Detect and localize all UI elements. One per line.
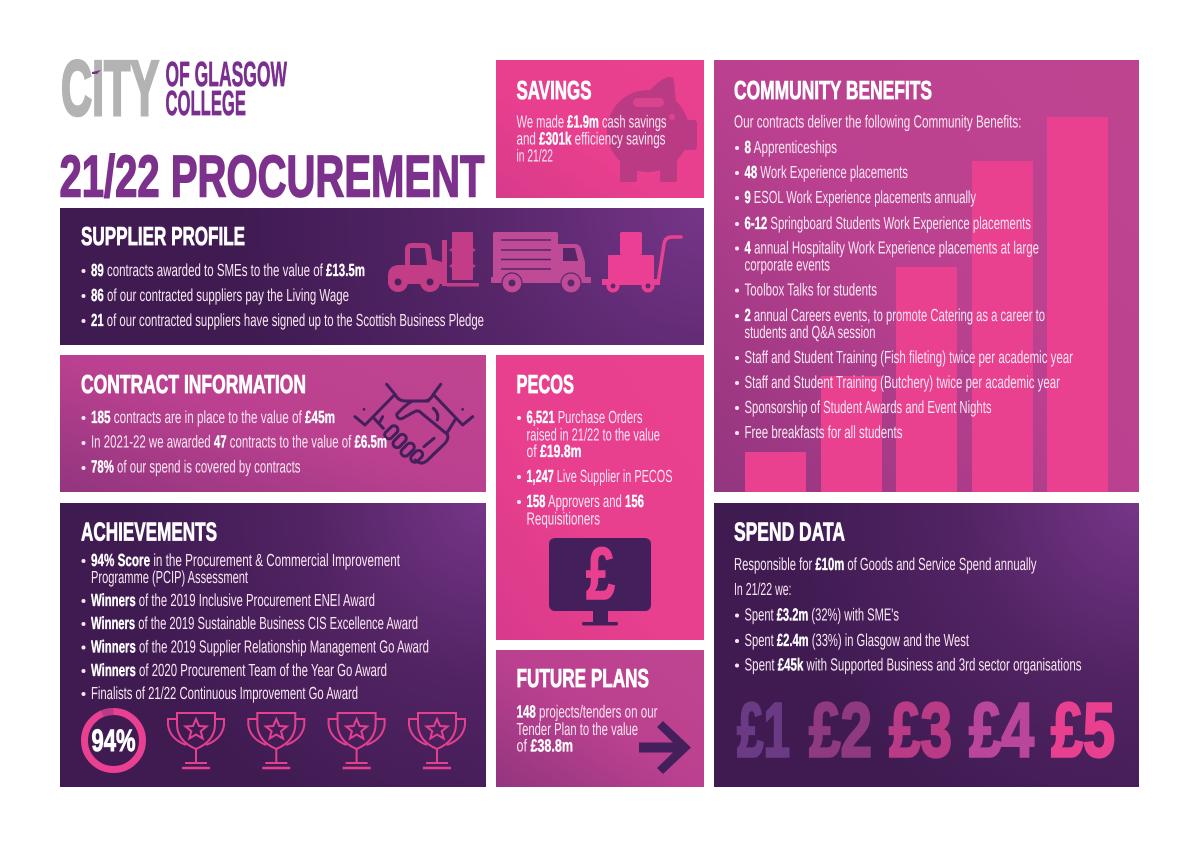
icon: arrow [639,721,691,774]
graphic: pound figures: £4 [969,688,1034,774]
icon: handshake [355,384,473,464]
graphic: pound figures: £1 [737,688,790,774]
graphic: pound figures: £2 [809,688,872,774]
list: community benefits: 2 annual Careers events, to promote Catering as a career to [744,305,1045,325]
logo: City of Glasgow College: CITY [61,44,159,132]
text: future plans detail: Tender Plan to the value [516,719,638,739]
heading: achievements: ACHIEVEMENTS [81,516,217,546]
heading: community benefits: COMMUNITY BENEFITS [734,75,932,105]
list: achievements: 94% Score in the Procurement & Commercial Improvement [91,550,400,570]
title: 21/22 PROCUREMENT [60,144,485,210]
icon: trophy 4 [409,713,465,768]
icon: delivery truck [491,232,591,293]
graphic: pound figures: £3 [889,688,952,774]
list: achievements: Winners of the 2019 Sustainable Business CIS Excellence Award [91,613,418,633]
list: community benefits: 9 ESOL Work Experience placements annually [744,187,976,207]
list: achievements: Programme (PCIP) Assessment [91,567,248,587]
text: future plans detail: 148 projects/tenders on our [516,702,658,722]
list: achievements: Winners of the 2019 Supplier Relationship Management Go Award [91,636,429,656]
chart: 94% donut: 94% [92,723,136,758]
list: community benefits: 4 annual Hospitality Work Experience placements at large [744,238,1039,258]
text: future plans detail [516,702,658,756]
icon: piggy bank [607,77,697,182]
list: supplier profile: 21 of our contracted suppliers have signed up to the Scottish Business Pledge [91,310,484,330]
panel: savings [496,60,704,198]
list: community benefits: students and Q&A session [744,322,876,342]
heading: PECOS: PECOS [516,369,574,399]
list: supplier profile [82,260,484,330]
list: PECOS: Requisitioners [526,508,600,528]
logo: City of Glasgow College: COLLEGE [166,84,246,123]
text: savings detail: We made £1.9m cash savings [516,112,667,132]
panel: achievements [60,503,486,787]
panel: spend data [714,503,1139,787]
heading: spend data: SPEND DATA [734,516,845,546]
list: supplier profile: 89 contracts awarded to SMEs to the value of £13.5m [91,260,365,280]
list: community benefits: 6-12 Springboard Students Work Experience placements [744,213,1031,233]
heading: savings: SAVINGS [516,75,592,105]
list: contract information: 185 contracts are in place to the value of £45m [91,407,335,427]
panel: contract information [60,355,486,492]
list: achievements [82,550,429,703]
heading: supplier profile: SUPPLIER PROFILE [81,221,245,251]
list: community benefits: 48 Work Experience placements [744,162,908,182]
text: spend intro: Responsible for £10m of Goods and Service Spend annually [734,554,1037,574]
list: community benefits: 8 Apprenticeships [744,137,837,157]
text: spend intro [734,554,1037,599]
list: supplier profile: 86 of our contracted suppliers pay the Living Wage [91,285,349,305]
text: spend intro: In 21/22 we: [734,579,792,599]
text: savings detail [516,112,667,166]
text: future plans detail: of £38.8m [516,736,573,756]
list: achievements: Winners of the 2019 Inclusive Procurement ENEI Award [91,590,375,610]
list: spend data [735,604,1082,674]
icon: monitor with pound sign: £ [586,532,615,615]
panel: PECOS [496,355,704,640]
list: PECOS [517,407,672,528]
icon: trophy 1 [168,713,224,768]
icon: trophy 2 [248,713,304,768]
text: community benefits intro: Our contracts deliver the following Community Benefits: [734,112,1022,132]
icon: trophy 3 [329,713,385,768]
icon: forklift [388,232,479,292]
graphic: pound figures: £5 [1051,688,1115,774]
list: community benefits: Toolbox Talks for students [744,280,877,300]
icon: monitor with pound sign [549,532,651,626]
text: OF GLASGOW [166,55,287,94]
list: achievements: Winners of 2020 Procurement Team of the Year Go Award [91,660,387,680]
graphic: pound figures [737,688,1115,774]
list: community benefits: corporate events [744,254,830,274]
icon: hand trolley [602,232,681,292]
list: PECOS: 6,521 Purchase Orders [526,407,643,427]
list: PECOS: 1,247 Live Supplier in PECOS [526,466,672,486]
list: PECOS: 158 Approvers and 156 [526,491,644,511]
heading: contract information: CONTRACT INFORMATION [81,369,306,399]
heading: future plans: FUTURE PLANS [516,663,649,693]
chart: 94% donut [84,712,142,770]
list: spend data: Spent £2.4m (33%) in Glasgow and the West [744,630,969,650]
text: savings detail: and £301k efficiency savings [516,128,666,148]
text: savings detail: in 21/22 [516,146,553,166]
list: PECOS: raised in 21/22 to the value [526,424,660,444]
list: community benefits [735,137,1073,442]
list: community benefits: Sponsorship of Student Awards and Event Nights [744,397,992,417]
list: achievements: Finalists of 21/22 Continuous Improvement Go Award [91,683,358,703]
list: community benefits: Free breakfasts for all students [744,422,903,442]
panel: future plans [496,650,704,787]
list: contract information: In 2021-22 we awarded 47 contracts to the value of £6.5m [91,432,387,452]
list: PECOS: of £19.8m [526,441,582,461]
list: spend data: Spent £3.2m (32%) with SME's [744,604,899,624]
list: contract information [82,407,387,476]
chart: rising bars [745,117,1108,492]
list: contract information: 78% of our spend is covered by contracts [91,456,301,476]
panel: community benefits [714,60,1139,492]
panel: supplier profile [60,208,704,345]
